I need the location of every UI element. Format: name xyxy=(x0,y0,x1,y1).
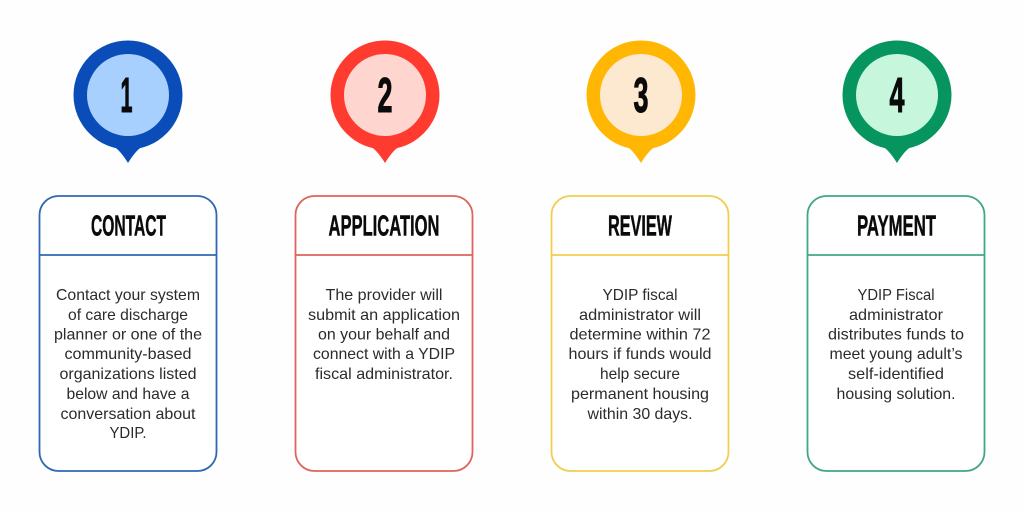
heading: payment: PAYMENT xyxy=(857,210,936,242)
text block: payment description: housing solution. xyxy=(836,386,956,403)
text block: review description: help secure xyxy=(600,366,680,383)
text block: contact description: below and have a xyxy=(66,386,190,403)
icon: pin 1: 1 xyxy=(120,69,132,123)
text block: contact description: planner or one of the xyxy=(54,326,202,344)
icon: pin 3 xyxy=(586,40,696,163)
text block: contact description: YDIP. xyxy=(110,425,146,442)
panel: payment card xyxy=(808,196,984,471)
text block: application description: on your behalf and xyxy=(318,326,450,344)
text block: application description xyxy=(308,287,460,383)
icon: pin 4 xyxy=(842,40,952,163)
text block: review description: hours if funds would xyxy=(568,346,712,363)
text block: application description: submit an application xyxy=(308,307,460,324)
text block: application description: The provider will xyxy=(326,287,442,304)
text block: contact description: community-based xyxy=(64,346,192,363)
panel: application card xyxy=(296,196,472,471)
step 2: application xyxy=(296,40,472,471)
text block: review description xyxy=(568,287,712,423)
step 3: review xyxy=(552,40,728,471)
heading: review: REVIEW xyxy=(608,210,672,242)
text block: contact description: organizations listed xyxy=(60,366,196,383)
text block: application description: fiscal administrator. xyxy=(315,366,453,383)
text block: application description: connect with a YDIP xyxy=(313,346,455,363)
step 4: payment xyxy=(808,40,984,471)
text block: payment description: self-identified xyxy=(848,366,944,383)
text block: review description: permanent housing xyxy=(571,386,709,403)
text block: payment description: administrator xyxy=(849,307,944,324)
panel: review card xyxy=(552,196,728,471)
text block: review description: determine within 72 xyxy=(570,326,711,344)
text block: contact description xyxy=(54,287,202,442)
text block: contact description: conversation about xyxy=(60,406,196,423)
text block: review description: within 30 days. xyxy=(587,406,692,423)
text block: contact description: of care discharge xyxy=(68,307,188,324)
text block: payment description: distributes funds to xyxy=(828,326,964,344)
text block: payment description: YDIP Fiscal xyxy=(858,287,934,304)
icon: pin 4: 4 xyxy=(890,69,904,123)
text block: payment description: meet young adult’s xyxy=(830,346,962,363)
heading: application: APPLICATION xyxy=(328,210,440,242)
text block: contact description: Contact your system xyxy=(56,287,200,304)
heading: contact: CONTACT xyxy=(91,210,166,242)
text block: payment description xyxy=(828,287,964,403)
icon: pin 1 xyxy=(74,40,182,163)
text block: review description: YDIP fiscal xyxy=(602,287,678,304)
panel: contact card xyxy=(40,196,216,471)
icon: pin 2: 2 xyxy=(378,69,392,123)
icon: pin 2 xyxy=(330,40,440,163)
text block: review description: administrator will xyxy=(579,307,701,324)
icon: pin 3: 3 xyxy=(634,69,648,123)
step 1: contact xyxy=(40,40,216,471)
